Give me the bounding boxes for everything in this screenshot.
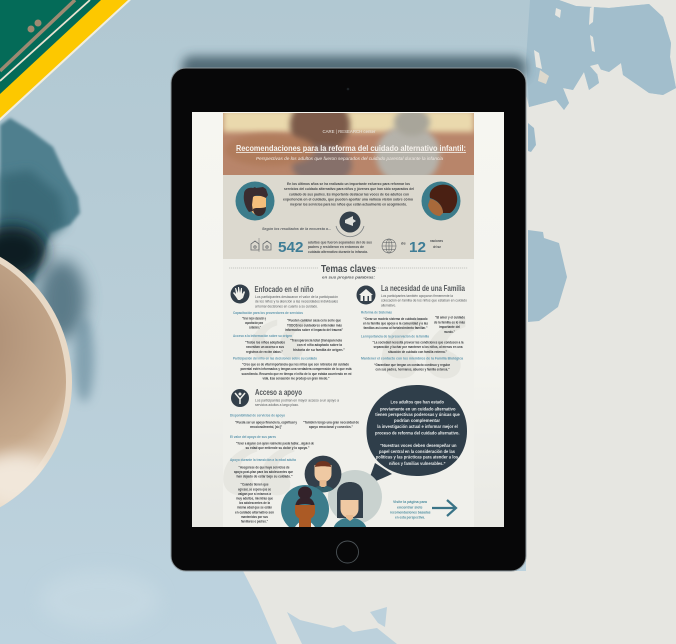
subsection: transition: apoyo post-plan para los adolescentes que [234, 470, 293, 474]
subsection: transition: valgan por sí mismos a [238, 492, 271, 496]
bubble text: “Nuestras voces deben desempeñar un [380, 443, 457, 448]
faint quotation marks: “ [372, 274, 472, 495]
stat description: padres y residieron en entornos de [308, 245, 364, 249]
avatar: bearded man [236, 182, 274, 220]
heading: Enfocado en el niño [254, 285, 314, 294]
icon: separated houses [251, 238, 271, 252]
heading: Acceso a apoyo [255, 388, 302, 397]
description [381, 294, 467, 306]
call to action text: en esta perspectiva. [395, 516, 425, 520]
stat: 12 countries: del sur [433, 245, 442, 249]
subsection: participation: sucediendo. Recuerdo que en tiempo el niño de lo que estaba ocurriendo en mi [242, 372, 352, 376]
subsection: family preservation: situación de cuidado con familia externa.” [388, 350, 447, 354]
subsection: information: necesitan un acceso a sus [246, 345, 284, 349]
subsection: system reform: importante del [439, 325, 460, 329]
subsection: training: capacitación para [245, 321, 263, 325]
person: man with short curly hair [305, 456, 341, 494]
subsection: transition: familiares o padres.” [241, 520, 268, 524]
stat description [308, 241, 372, 253]
person: young woman on grey circle [328, 470, 382, 530]
panel: Enfocado en el niño [230, 284, 352, 380]
subsection: training: informados sobre el impacto del trauma” [285, 328, 343, 332]
subsection: training: “Pueden cambiar casa cero serie que [287, 318, 341, 322]
subsection: participation: vida. Esa sensación me produjo un gran miedo.” [262, 376, 330, 380]
home button [336, 541, 358, 563]
description: Los participantes podrían en mayor acceso a un apoyo a [255, 398, 339, 402]
intro text [283, 182, 414, 206]
subsection: participation: parental estén informados y tengan una verdadera comprensión de lo que está [240, 367, 352, 371]
section heading: Temas claves: Temas claves [321, 264, 376, 275]
bubble text [375, 400, 460, 466]
subsection: training [233, 311, 343, 332]
subsection: biological family contact: “Garantizar que tengan un contacto continuo y regular [374, 363, 451, 367]
subsection: peers [230, 435, 314, 450]
subsection: services: apoyo emocional y conexión.” [309, 425, 353, 429]
subsection: information: “Todos los niños adoptados [245, 340, 285, 344]
subsection: transition: Apoyo durante la transición a la edad adulta [230, 458, 296, 462]
bubble text: niños y familias vulnerables.” [389, 461, 446, 466]
subsection: training: “Tener mejor educación y [242, 316, 266, 320]
subsection: information: con el niño adoptado sobre la [297, 343, 342, 347]
subsection: transition: mantenidos por sus [241, 515, 268, 519]
stat: 12 countries: 12 [409, 239, 426, 256]
subsection: transition: misma edad que se están [237, 506, 272, 510]
subsection: system reform: “Crear un modelo sistema de cuidado basado [364, 317, 428, 321]
subsection: information: Acceso a la información sobre su origen [233, 334, 292, 338]
subsection: services: “También tengo una gran necesidad de [303, 420, 359, 424]
section heading: Temas claves: en sus propios palabras: [322, 274, 376, 280]
description: al tomar decisiones en cuanto a su cuidado. [255, 304, 318, 308]
description: colocación en familia de los niños que estaban en cuidado [381, 298, 467, 302]
bubble text: proceso de reforma del cuidado alternativo. [375, 430, 460, 435]
description: Los participantes destacaron el valor de la participación [255, 295, 338, 299]
subsection: system reform: mundo.” [444, 330, 455, 334]
heading: La necesidad de una Familia [381, 284, 465, 293]
subsection: training: TODOS los cuidadores entiendan más [287, 324, 342, 328]
icon: globe [382, 239, 396, 253]
subsection: participation: “Creo que es de vital importancia que los niños que son retirados del cuidado [242, 362, 349, 366]
subsection: transition [230, 458, 296, 524]
subsection: transition: egresar, se espera que se [238, 488, 271, 492]
subsection: information: registros de recién datos.” [246, 350, 283, 354]
bubble text: previamente en un cuidado alternativo [380, 406, 456, 411]
intro text: En los últimos años se ha realizado un importante esfuerzo para reformar los [287, 182, 410, 186]
bubble text: podrían complementar [394, 418, 440, 423]
subsection: transition: en cuidado alternativo son [235, 510, 274, 514]
stat description: cuidado alternativo durante la infancia. [308, 250, 368, 254]
subsection: transition: “Cuando tienen que [240, 482, 269, 486]
subsection: biological family contact [361, 356, 463, 372]
subsection: system reform: “El amor y el cuidado [435, 316, 465, 320]
description: de los niños y la atención a las necesidades individuales [255, 300, 338, 304]
subsection: transition: los adolescentes de la [239, 501, 270, 505]
stat description: adultos que fueron separados del de sus [308, 240, 372, 244]
description: servicios adultos a largo plazo. [255, 403, 299, 407]
description: Los participantes también apoyaron firmemente la [381, 294, 453, 298]
section heading: Temas claves [229, 264, 468, 280]
intro panel [223, 175, 474, 259]
subsection: family preservation: separación y luchar por mantener a los niños, al menos en una [374, 345, 463, 349]
faint quotation marks: “ [245, 291, 310, 435]
subsection: participation: Participación del niño en las decisiones sobre su cuidado [233, 356, 317, 360]
header photo [223, 113, 474, 175]
subsection: system reform: de la familia es lo más [434, 320, 465, 324]
subsection: information [233, 334, 345, 354]
coffee cup [0, 256, 72, 508]
bubble text: políticas y las prácticas para atender a los [376, 455, 459, 460]
call to action text: Visite la página para [393, 500, 427, 504]
background: dark paint stains [0, 118, 160, 630]
intro text: servicios del cuidado alternativo para niños y jóvenes que han sido separados del [284, 187, 414, 191]
intro text: cuidado de sus padres. Es importante destacar las voces de los adultos con [289, 192, 409, 196]
subsection: training: cuidadores.” [249, 326, 261, 330]
logo: CARE | RESEARCH center [322, 129, 376, 134]
bubble text: papel central en la consideración de las [379, 449, 456, 454]
tablet body [171, 68, 526, 571]
subsection: services: emocional/mental, [sic]” [250, 425, 282, 429]
stat: 12 countries: de [401, 240, 406, 246]
subsection: family preservation: La importancia de la preservación de la familia [361, 334, 429, 338]
stat: 12 countries: naciones [430, 239, 443, 243]
subsection: transition: “Asegúrese de que haya servicios de [238, 466, 290, 470]
faint quotation marks [224, 318, 466, 495]
subsection: system reform: en la familia que apoye a la comunidad y a las [363, 322, 428, 326]
subsection: information: “Transparencia total (transparencia [290, 338, 342, 342]
subsection: services: “Pueda ser un apoyo financiero, espiritual y [235, 420, 297, 424]
person: woman with hair bun [281, 485, 329, 540]
subtitle: Perspectivas de los adultos que fueron separados del cuidado parental durante la infancia [256, 156, 444, 161]
bubble text: tienen perspectivas poderosas y únicas que [375, 412, 460, 417]
panel: La necesidad de una Familia [356, 284, 467, 372]
camera [347, 88, 349, 90]
illustration: group of three adults [281, 456, 382, 540]
subsection: peers: “Tener a alguien con quien realmente pueda hablar... alguien de [236, 442, 314, 446]
subsection: transition: muy adultos, mientras que [236, 496, 273, 500]
call to action text [390, 500, 431, 520]
subsection: system reform [361, 310, 465, 334]
arrow [432, 500, 456, 516]
decorative stripes: green and yellow corner [0, 0, 131, 121]
subsection: participation [233, 356, 352, 380]
icon: hand [230, 284, 250, 304]
description [255, 296, 338, 308]
icon: support [231, 389, 249, 407]
subsection: peers: su edad que entiende su dolor y lo apoya.” [246, 446, 310, 450]
call to action text: encontrar siete [397, 505, 423, 509]
subsection: peers: El valor del apoyo de sus pares [230, 435, 276, 439]
stat: 542: 542 [278, 239, 304, 256]
description: alternativo. [381, 304, 396, 308]
subsection: services: Disponibilidad de servicios de apoyo [230, 414, 285, 418]
subsection: biological family contact: Mantener el contacto con los miembros de la Familia Biológica [361, 356, 463, 360]
subsection: information: historia de su familia de origen.” [293, 348, 345, 352]
subsection: services [230, 414, 359, 429]
bubble text: la investigación actual e informar mejor el [377, 424, 458, 429]
subsection: biological family contact: con sus padres, hermanos, abuelos y familia extensa.” [376, 368, 450, 372]
survey lead-in: Según los resultados de la encuesta a... [262, 226, 331, 231]
subsection: family preservation: “La sociedad necesita proveer las condiciones que conducen a la [372, 340, 464, 344]
panel: Acceso a apoyo [230, 388, 359, 524]
subsection: transition: han dejado de estar bajo su cuidado.” [236, 474, 293, 478]
speech bubble [366, 385, 467, 485]
faint quotation marks: “ [215, 406, 300, 594]
subsection: system reform: familias así como al fortalecimiento familiar.” [364, 326, 428, 330]
infographic page [223, 113, 474, 527]
icon: megaphone [336, 212, 364, 237]
intro text: experiencia en el cuidado, que pueden aportar una valiosa visión sobre cómo [283, 197, 413, 201]
icon: family house [356, 286, 376, 304]
description [255, 398, 339, 407]
subsection: system reform: Reforma de Sistemas [361, 310, 392, 314]
subsection: family preservation [361, 334, 464, 354]
tablet shadow [182, 56, 526, 80]
title: Recomendaciones para la reforma del cuidado alternativo infantil: [236, 144, 466, 153]
bubble text: Los adultos que han estado [390, 400, 444, 404]
call to action text: recomendaciones basadas [390, 510, 431, 514]
intro text: mejorar los servicios para los niños que están actualmente en acogimiento. [290, 202, 407, 206]
avatar: woman with curly hair [422, 182, 460, 220]
tablet screen [192, 112, 504, 527]
subsection: training: Capacitación para los proveedores de servicios [233, 311, 303, 315]
stat: 12 countries [401, 240, 443, 252]
